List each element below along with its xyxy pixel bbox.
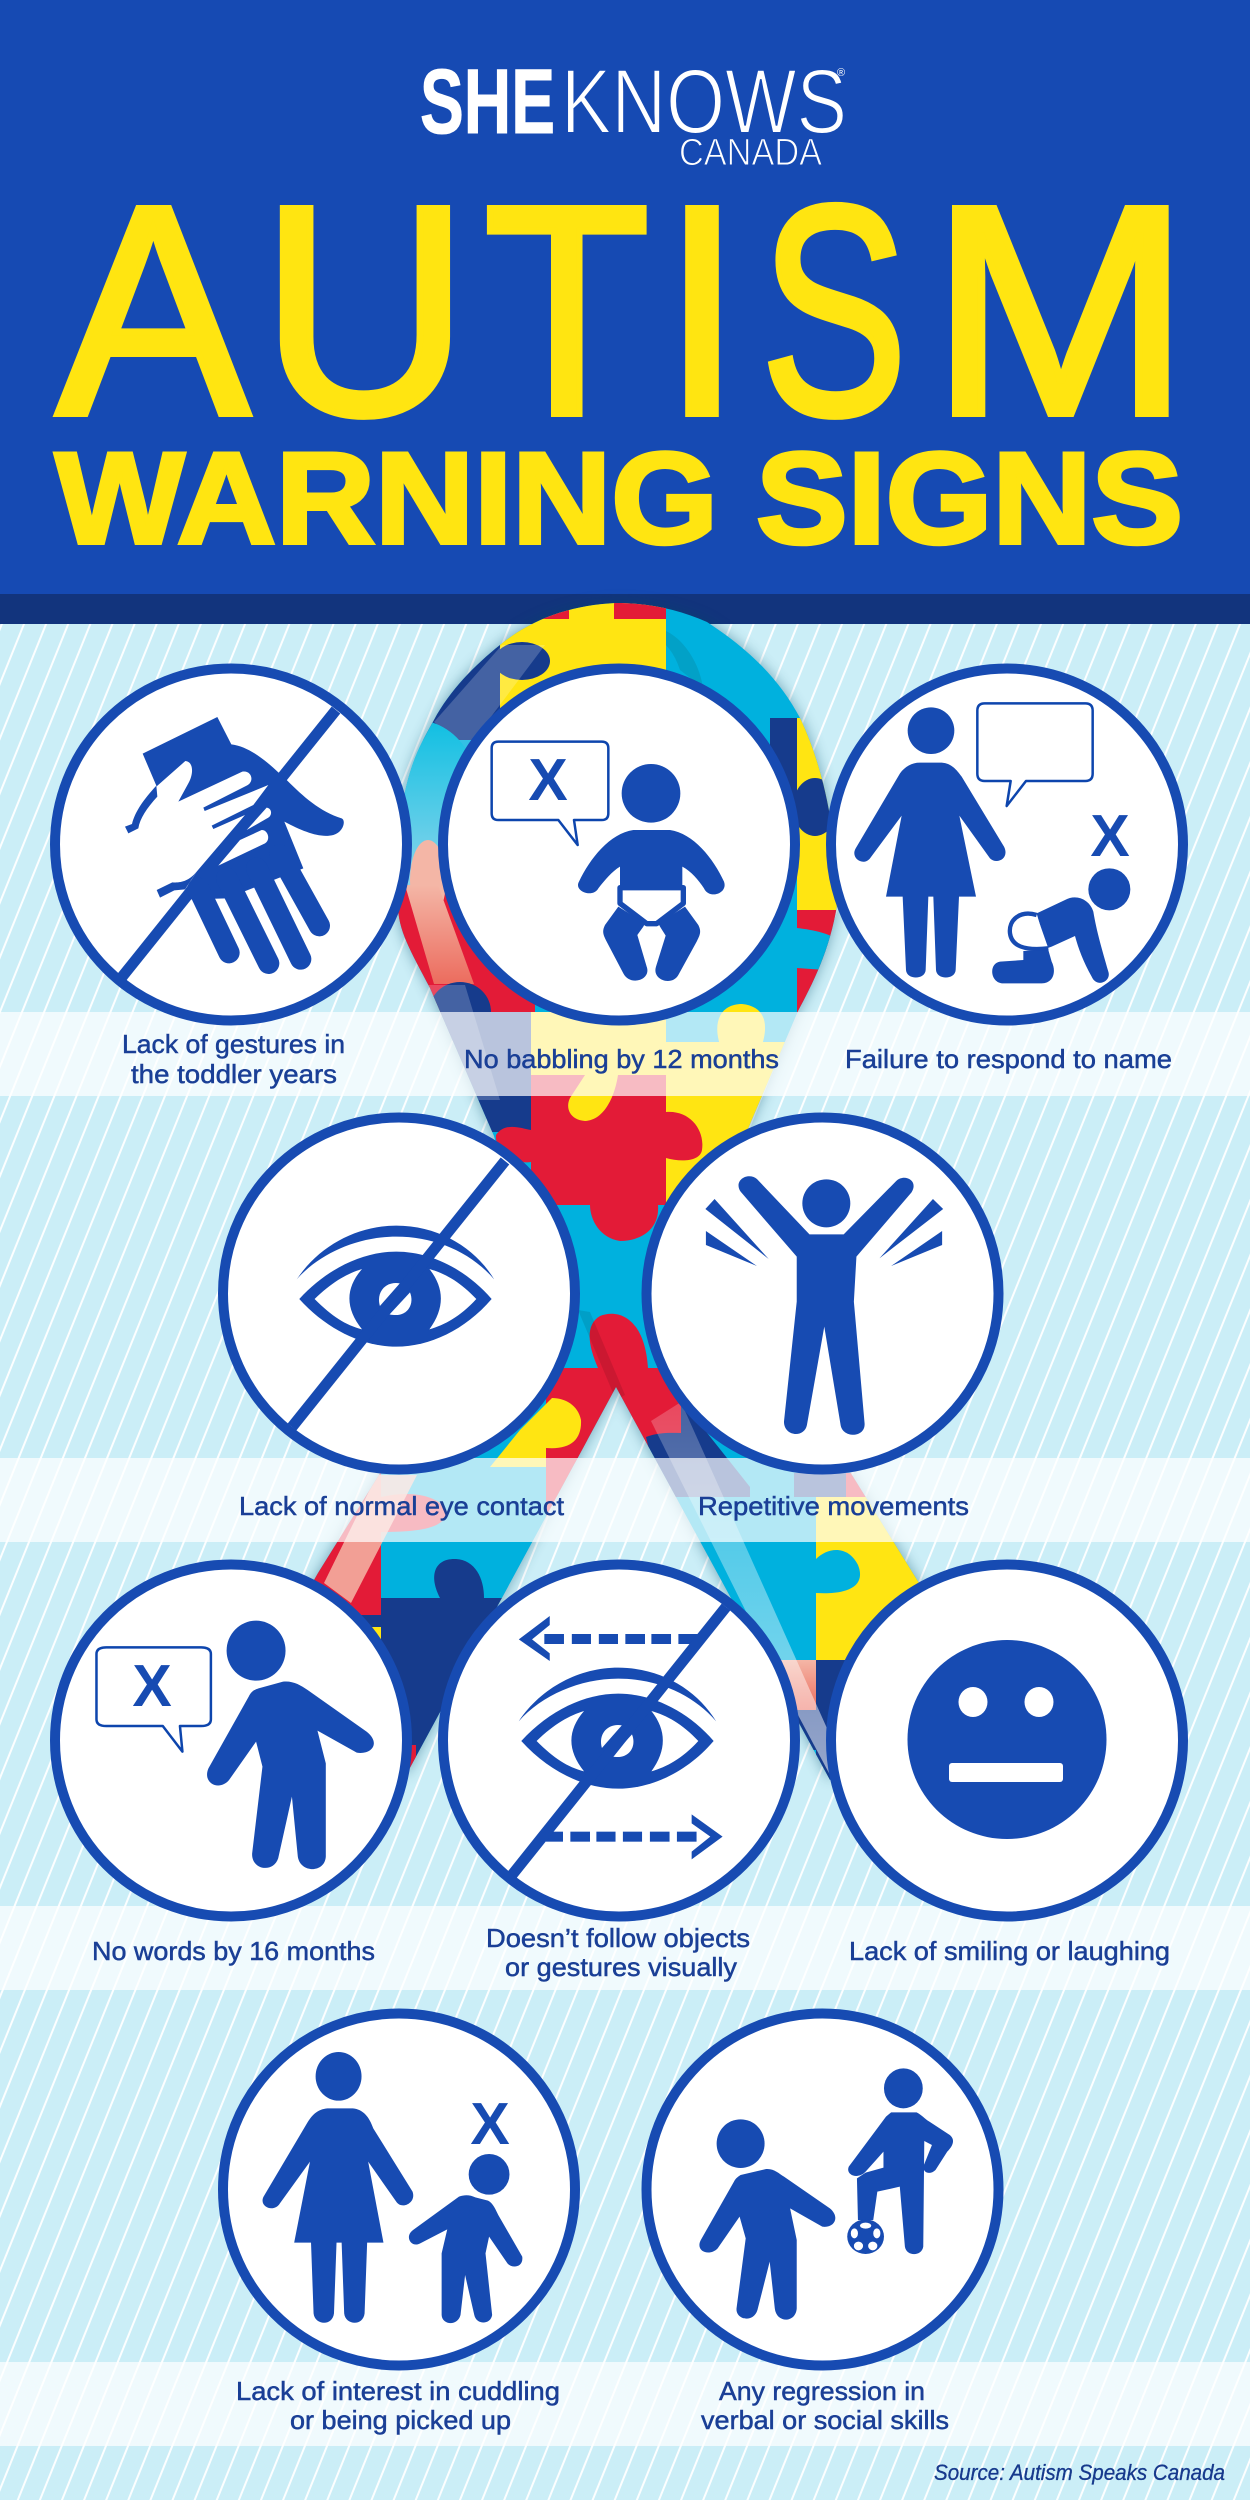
sign 2: no babbling baby bbox=[443, 668, 795, 1020]
sign 7: eye does not follow objects bbox=[443, 1564, 795, 1916]
slash bbox=[512, 1607, 726, 1875]
label: no babbling: No babbling by 12 months bbox=[464, 1044, 779, 1074]
sign 6: no words child bbox=[55, 1564, 407, 1916]
crossing tiles bbox=[546, 1314, 682, 1470]
icon: boys with ball bbox=[699, 2068, 953, 2320]
label: regression: Any regression in bbox=[719, 2376, 925, 2406]
label band row 4 bbox=[0, 2362, 1250, 2446]
icon: soccer ball bbox=[847, 2219, 884, 2254]
title: AUTISM: S bbox=[761, 145, 907, 477]
logo: SheKnows Canada: SHE bbox=[420, 51, 555, 153]
label: lack of gestures: Lack of gestures in bbox=[122, 1029, 345, 1059]
label: cuddling bbox=[236, 2376, 560, 2435]
icon: figure with motion lines bbox=[705, 1176, 943, 1435]
puzzle-piece awareness ribbon bbox=[314, 603, 919, 1780]
sign 5: repetitive movements figure bbox=[646, 1118, 998, 1470]
speech X: X bbox=[528, 747, 568, 813]
slash bbox=[292, 1161, 505, 1427]
label: doesn't follow objects: or gestures visually bbox=[505, 1952, 737, 1982]
icon: eye bbox=[297, 1226, 494, 1347]
sign 4: eye crossed out bbox=[223, 1118, 575, 1470]
icon: hands bbox=[125, 717, 344, 963]
red puzzle piece bbox=[496, 1075, 702, 1241]
top of loop tiles bbox=[500, 603, 666, 708]
right leg tiles bbox=[646, 1400, 750, 1497]
logo: SheKnows Canada: CANADA bbox=[679, 132, 823, 174]
sign 3: mother and crawling baby bbox=[831, 668, 1183, 1020]
label: regression bbox=[701, 2376, 949, 2435]
icon: mother and child bbox=[263, 2052, 522, 2323]
title: AUTISM: U bbox=[261, 145, 469, 478]
label: doesn't follow objects bbox=[486, 1923, 750, 1982]
icon: mother and baby bbox=[854, 703, 1130, 983]
icon: neutral face bbox=[908, 1640, 1106, 1839]
sign 8: neutral face bbox=[831, 1564, 1183, 1916]
label: eye contact: Lack of normal eye contact bbox=[239, 1491, 565, 1521]
title: AUTISM: I bbox=[662, 145, 742, 478]
header panel bbox=[0, 0, 1250, 624]
title: AUTISM: T bbox=[484, 145, 650, 477]
sign 10: children and soccer ball bbox=[646, 2014, 998, 2366]
left leg tiles bbox=[501, 1516, 546, 1600]
X mark: X bbox=[470, 2091, 510, 2157]
awareness ribbon shadow bbox=[280, 603, 955, 1780]
label: no words: No words by 16 months bbox=[92, 1936, 375, 1966]
logo: SheKnows Canada: KNOWS bbox=[561, 51, 847, 153]
label: doesn't follow objects: Doesn’t follow objects bbox=[486, 1923, 750, 1953]
label: failure to respond: Failure to respond to name bbox=[845, 1044, 1172, 1074]
icon: baby bbox=[492, 742, 725, 981]
icon: eye with arrows bbox=[519, 1616, 723, 1859]
label: lack of gestures: the toddler years bbox=[131, 1059, 337, 1089]
slash bbox=[122, 710, 336, 977]
label: smiling or laughing: Lack of smiling or laughing bbox=[849, 1936, 1170, 1966]
arrow left bbox=[519, 1616, 698, 1661]
arrow right bbox=[546, 1814, 723, 1859]
subtitle: WARNING SIGNS: WARNING SIGNS bbox=[55, 425, 1183, 571]
title: AUTISM: M bbox=[930, 143, 1191, 477]
label band row 1 bbox=[0, 1012, 1250, 1096]
sign 1: hands crossed out bbox=[55, 668, 407, 1020]
striped background bbox=[0, 624, 1250, 2500]
label: regression: verbal or social skills bbox=[701, 2405, 949, 2435]
right loop tiles bbox=[770, 718, 797, 798]
title: AUTISM: A bbox=[57, 145, 250, 478]
label: lack of gestures bbox=[122, 1029, 345, 1089]
icon: child with speech bubble bbox=[96, 1621, 374, 1869]
centre tiles bbox=[531, 1012, 666, 1076]
speech X: X bbox=[132, 1653, 172, 1719]
logo: SheKnows Canada: ® bbox=[837, 67, 845, 79]
label band row 2 bbox=[0, 1458, 1250, 1542]
source note: Source: Autism Speaks Canada bbox=[934, 2460, 1225, 2485]
title: AUTISM bbox=[57, 143, 1191, 478]
sign 9: mother and child bbox=[223, 2014, 575, 2366]
logo: SheKnows Canada bbox=[420, 51, 847, 174]
label band row 3 bbox=[0, 1906, 1250, 1990]
label: cuddling: Lack of interest in cuddling bbox=[236, 2376, 560, 2406]
X mark: X bbox=[1090, 803, 1130, 869]
label: cuddling: or being picked up bbox=[290, 2405, 511, 2435]
label: repetitive movements: Repetitive movements bbox=[698, 1491, 969, 1521]
icon: eye bbox=[519, 1668, 716, 1789]
